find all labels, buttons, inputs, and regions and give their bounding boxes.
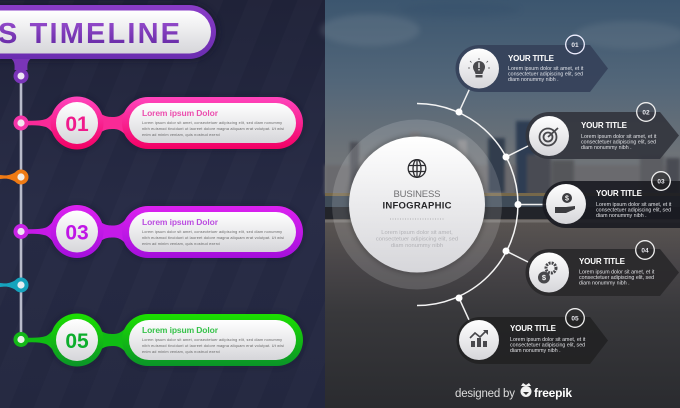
timeline item 03: Lorem ipsum dolor sit amet, consectetuer adipiscing elit, sed diam nonummy (142, 230, 282, 234)
timeline item 05 (14, 313, 303, 367)
icon: hand with dollar: $ (565, 196, 569, 202)
number badge 05: 05 (571, 316, 579, 322)
timeline item 03: 03 (65, 222, 89, 244)
number badge 03 (652, 172, 670, 190)
dotted divider and description: consectetuer adipiscing elit, sed (376, 236, 458, 242)
timeline item 03: enim ad minim veniam, quis nostrud exerci (142, 242, 220, 246)
icon: gears and coin: $ (542, 273, 547, 282)
timeline item 03 (14, 204, 303, 258)
title and text 01: Lorem ipsum dolor sit amet, et it (508, 66, 584, 72)
timeline item 05: Lorem ipsum Dolor (142, 325, 219, 335)
dotted divider and description: diam nonummy nibh (391, 243, 443, 249)
title and text 04: diam nonummy nibh . (579, 280, 630, 286)
number badge 01: 01 (571, 42, 579, 49)
icon: target (540, 128, 558, 146)
number badge 05 (566, 309, 584, 327)
title and text 01: diam nonummy nibh . (508, 77, 559, 83)
timeline item 01: 01 (65, 113, 89, 136)
timeline item 03: nibh euismod tincidunt ut laoreet dolore magna aliquam erat volutpat. Ut wisi (142, 236, 284, 240)
footer credit: designed by freepik: designed by (455, 388, 515, 400)
title and text 03: Lorem ipsum dolor sit amet, et it (596, 202, 672, 208)
node: orange step (0, 170, 28, 184)
central circle: business infographic (332, 120, 502, 290)
arc connector with nodes (417, 88, 548, 322)
title and text 02 (581, 121, 657, 151)
number badge 03: 03 (657, 178, 665, 186)
timeline item 01: Lorem ipsum dolor sit amet, consectetuer adipiscing elit, sed diam nonummy (142, 121, 282, 125)
icon: light bulb (468, 58, 490, 78)
timeline item 01: enim ad minim veniam, quis nostrud exerci (142, 133, 220, 137)
timeline item 01 (14, 96, 303, 150)
heading: infographic: INFOGRAPHIC (382, 200, 452, 212)
right panel: photo background of city and road (320, 0, 680, 408)
title and text 01: consectetuer adipiscing elit, sed (508, 72, 583, 78)
dotted divider and description: Lorem ipsum dolor sit amet, (381, 230, 453, 236)
title and text 04: consectetuer adipiscing elit, sed (579, 275, 654, 281)
number badge 01 (566, 35, 584, 54)
footer credit: designed by freepik (455, 383, 572, 400)
title and text 01 (508, 54, 584, 83)
title and text 02: consectetuer adipiscing elit, sed (581, 140, 656, 146)
title and text 05 (510, 324, 586, 354)
icon: gears and coin (538, 263, 556, 284)
number badge 02: 02 (642, 110, 650, 116)
number badge 04 (636, 241, 654, 259)
title and text 05: Lorem ipsum dolor sit amet, et it (510, 337, 586, 343)
step 04: gears tag (526, 241, 679, 296)
title and text 05: YOUR TITLE (510, 324, 557, 333)
icon: hand with dollar (555, 193, 575, 213)
title and text 01: YOUR TITLE (508, 54, 555, 63)
title banner (0, 3, 219, 84)
title and text 04: Lorem ipsum dolor sit amet, et it (579, 270, 655, 276)
step 05: growth chart tag (456, 309, 608, 364)
title and text 02: Lorem ipsum dolor sit amet, et it (581, 134, 657, 140)
timeline item 05: nibh euismod tincidunt ut laoreet dolore magna aliquam erat volutpat. Ut wisi (142, 344, 284, 348)
number badge 04: 04 (641, 248, 649, 254)
dotted divider and description (376, 219, 458, 249)
title and text 05: diam nonummy nibh . (510, 348, 561, 354)
icon: globe (408, 160, 426, 177)
timeline item 05: 05 (65, 330, 89, 353)
title and text 02: YOUR TITLE (581, 121, 628, 130)
title and text 03: YOUR TITLE (596, 189, 643, 198)
icon: freepik logo (520, 383, 532, 397)
title and text 03: diam nonummy nibh . (596, 213, 647, 219)
timeline item 03: Lorem ipsum Dolor (142, 217, 219, 227)
step 01: idea tag (456, 35, 608, 92)
timeline vertical line (20, 76, 22, 340)
timeline item 05: Lorem ipsum dolor sit amet, consectetuer adipiscing elit, sed diam nonummy (142, 338, 282, 342)
heading: business: BUSINESS (394, 189, 440, 200)
timeline item 01: nibh euismod tincidunt ut laoreet dolore magna aliquam erat volutpat. Ut wisi (142, 127, 284, 131)
step 02: target tag (526, 103, 679, 159)
node: blue step (0, 278, 28, 292)
footer credit: designed by freepik: freepik (534, 386, 572, 400)
number badge 02 (637, 103, 655, 121)
title and text 02: diam nonummy nibh . (581, 145, 632, 151)
title and text 05: consectetuer adipiscing elit, sed (510, 342, 585, 348)
title and text 04: YOUR TITLE (579, 257, 626, 266)
title and text 03 (596, 189, 672, 219)
title and text 04 (579, 257, 655, 286)
timeline item 01: Lorem ipsum Dolor (142, 108, 219, 118)
title and text 03: consectetuer adipiscing elit, sed (596, 208, 671, 214)
icon: growth chart (470, 330, 488, 347)
title text: S TIMELINE (0, 18, 180, 50)
step 03: money hand tag (542, 172, 680, 228)
left panel: navy background (0, 0, 325, 408)
timeline item 05: enim ad minim veniam, quis nostrud exerci (142, 350, 220, 354)
